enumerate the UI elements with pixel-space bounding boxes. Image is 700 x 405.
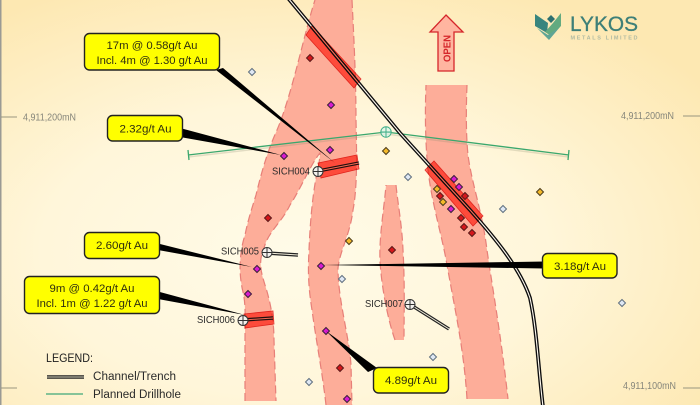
grid label: 4,911,100mN right: 4,911,100mN: [623, 381, 676, 392]
legend: [46, 351, 181, 401]
callout: 17m @ 0.58g/t Au: [84, 34, 220, 70]
callout: 2.60g/t Au: 2.60g/t Au: [96, 240, 148, 252]
short trench lines: [243, 163, 449, 329]
callout: 4.89g/t Au: [374, 368, 448, 393]
sample diamonds: red: [264, 54, 476, 372]
collar: SICH005: SICH005: [221, 246, 259, 258]
red intercept bars: [244, 26, 483, 328]
mineralised zone: central lens: [380, 185, 404, 340]
callout: 2.32g/t Au: [108, 116, 182, 141]
callout: 9m @ 0.42g/t Au: Incl. 1m @ 1.22 g/t Au: [36, 298, 148, 310]
grid label: 4,911,200mN left: 4,911,200mN: [23, 112, 76, 124]
collar: SICH004: SICH004: [272, 166, 310, 178]
planned drillhole line: [188, 132, 569, 160]
mineralised zone: forked west zone: [240, 0, 357, 405]
callout: 17m @ 0.58g/t Au: Incl. 4m @ 1.30 g/t Au: [96, 55, 208, 67]
sample diamonds: magenta: [244, 102, 462, 402]
callout: 2.32g/t Au: 2.32g/t Au: [120, 124, 172, 136]
logo: Lykos Metals: [535, 12, 638, 42]
legend: LEGEND:: [46, 351, 93, 365]
collar: planned drillhole: [381, 127, 391, 137]
collar: SICH007: SICH007: [365, 298, 403, 310]
arrow: OPEN: OPEN: [442, 35, 454, 62]
callout: 9m @ 0.42g/t Au: 9m @ 0.42g/t Au: [50, 283, 134, 295]
grid label: 4,911,200mN right: 4,911,200mN: [621, 111, 674, 122]
callout: 4.89g/t Au: 4.89g/t Au: [385, 375, 437, 387]
callout: 3.18g/t Au: 3.18g/t Au: [554, 261, 606, 273]
arrow: OPEN: [430, 15, 463, 71]
callout: 2.60g/t Au: [84, 232, 160, 258]
mineralised zone: east zone: [425, 85, 508, 399]
legend item: channel/trench: Channel/Trench: [93, 371, 176, 383]
sample diamonds: gold: [346, 148, 544, 244]
leader wedges: [158, 68, 544, 372]
callout: 3.18g/t Au: [542, 254, 617, 278]
logo icon: [535, 13, 561, 40]
logo: Lykos Metals: LYKOS: [570, 12, 638, 36]
callout: 9m @ 0.42g/t Au: [24, 276, 160, 314]
logo: Lykos Metals: METALS LIMITED: [570, 36, 638, 42]
sample diamonds: pale blue: [248, 68, 626, 386]
collar: SICH006: SICH006: [197, 314, 235, 326]
main channel/trench: [288, 0, 543, 405]
grid label: 4,911,200mN left: [1, 112, 76, 124]
legend item: planned drillhole: Planned Drillhole: [93, 389, 181, 401]
callout: 17m @ 0.58g/t Au: 17m @ 0.58g/t Au: [106, 40, 198, 52]
